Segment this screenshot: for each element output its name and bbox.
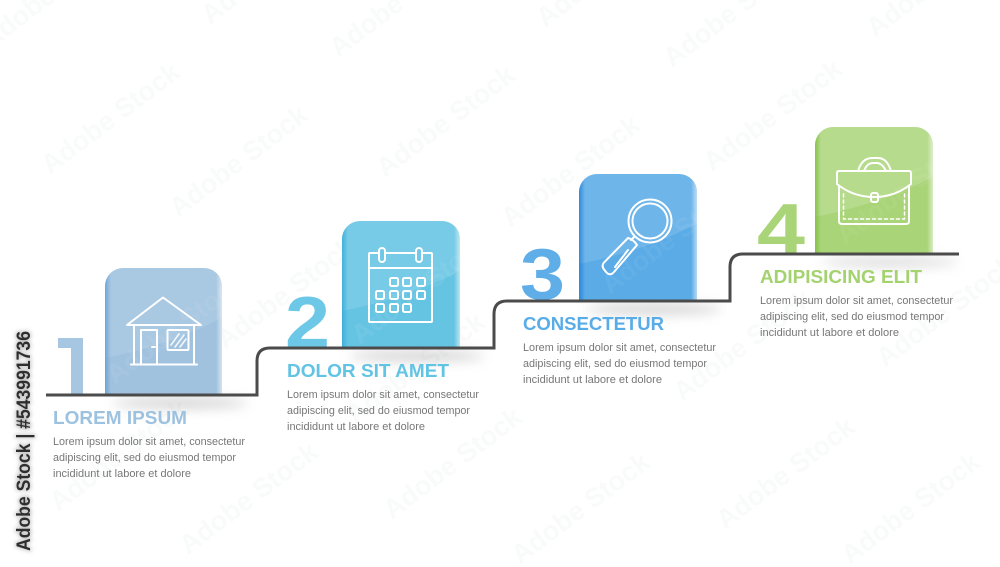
description 1: Lorem ipsum dolor sit amet, consectetur	[53, 436, 245, 448]
watermark: background pattern: Adobe Stock	[174, 436, 324, 560]
number 3: 3	[520, 235, 565, 315]
description 3	[523, 342, 716, 386]
card 2 with calendar icon	[342, 221, 460, 348]
shadow: under step 4	[822, 257, 958, 267]
description 4: incididunt ut labore et dolore	[760, 327, 899, 339]
description 1: incididunt ut labore et dolore	[53, 468, 191, 480]
watermark: background pattern: Adobe Stock	[711, 411, 861, 535]
heading: dolor sit amet: DOLOR SIT AMET	[287, 361, 449, 381]
card 1 with house icon	[105, 268, 222, 395]
number 1	[58, 338, 83, 394]
watermark: background pattern: Adobe Stock	[36, 56, 186, 180]
vertical stock id label: Adobe Stock | #543991736	[14, 331, 35, 551]
step 3 text	[523, 314, 716, 386]
description 2: incididunt ut labore et dolore	[287, 421, 425, 433]
description 4: adipiscing elit, sed do eiusmod tempor	[760, 311, 944, 323]
watermark: background pattern: Adobe Stock	[378, 401, 528, 525]
description 3: incididunt ut labore et dolore	[523, 374, 662, 386]
description 2	[287, 389, 479, 433]
watermark: background pattern: Adobe Stock	[164, 99, 314, 223]
description 3: adipiscing elit, sed do eiusmod tempor	[523, 358, 707, 370]
watermark: background pattern: Adobe Stock	[668, 283, 818, 407]
description 2: adipiscing elit, sed do eiusmod tempor	[287, 405, 470, 417]
watermark: background pattern: Adobe Stock	[341, 306, 491, 430]
heading: adipisicing elit: ADIPISICING ELIT	[760, 267, 922, 287]
number 4: 4	[757, 190, 805, 270]
watermark: background pattern: Adobe Stock	[211, 231, 361, 355]
description 1	[53, 436, 245, 480]
description 3: Lorem ipsum dolor sit amet, consectetur	[523, 342, 716, 354]
card 3 with magnifier icon	[579, 174, 697, 301]
step 2 text	[287, 361, 479, 433]
shadow: under step 2	[349, 351, 485, 361]
watermark: background pattern: Adobe Stock	[506, 446, 656, 567]
watermark over cards: Adobe Stock	[346, 226, 496, 350]
icon: briefcase	[837, 158, 911, 224]
number 2: 2	[285, 283, 330, 363]
number 1: 1	[57, 331, 97, 411]
heading: consectetur: CONSECTETUR	[523, 314, 664, 334]
watermark over cards: Adobe Stock	[101, 266, 251, 390]
vertical stock id label: Adobe Stock | #543991736	[14, 331, 35, 551]
watermark over cards: Adobe Stock	[831, 126, 981, 250]
watermark: background pattern: Adobe Stock	[371, 59, 521, 183]
description 4: Lorem ipsum dolor sit amet, consectetur	[760, 295, 953, 307]
staircase line	[46, 254, 959, 395]
step 1 text	[53, 408, 245, 480]
heading: lorem ipsum: LOREM IPSUM	[53, 408, 187, 428]
description 1: adipiscing elit, sed do eiusmod tempor	[53, 452, 236, 464]
watermark: background pattern: Adobe Stock	[496, 109, 646, 233]
description 2: Lorem ipsum dolor sit amet, consectetur	[287, 389, 479, 401]
shadow: under step 3	[586, 304, 722, 314]
icon: magnifier	[603, 200, 672, 274]
watermark: background pattern: Adobe Stock	[698, 53, 848, 177]
shadow: under step 1	[112, 398, 248, 408]
description 4	[760, 295, 953, 339]
step 4 text	[760, 267, 953, 339]
watermark: background pattern: Adobe Stock	[44, 393, 194, 517]
watermark over cards: Adobe Stock	[596, 176, 746, 300]
icon: calendar	[369, 248, 432, 322]
card 4 with briefcase icon	[815, 127, 933, 254]
watermark: background pattern: Adobe Stock	[836, 446, 986, 567]
watermark over cards	[101, 126, 981, 390]
icon: house	[127, 298, 201, 364]
